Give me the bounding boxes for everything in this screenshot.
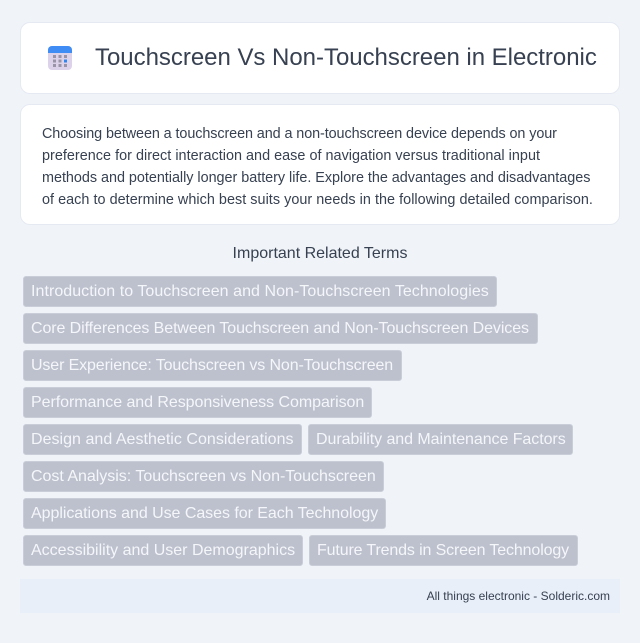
footer bar <box>20 579 620 613</box>
tag: future trends <box>309 535 578 566</box>
tag: core differences: Core Differences Between Touchscreen and Non-Touchscreen Devices <box>31 320 529 337</box>
tag: design <box>23 424 302 455</box>
tag: accessibility: Accessibility and User Demographics <box>31 542 295 559</box>
tag: performance <box>23 387 372 418</box>
tag: durability: Durability and Maintenance Factors <box>316 431 566 448</box>
tag: user experience: User Experience: Touchscreen vs Non-Touchscreen <box>31 357 393 374</box>
tag: user experience <box>23 350 402 381</box>
icon: calendar <box>48 46 72 70</box>
intro text: preference for direct interaction and ease of navigation versus traditional input <box>42 148 540 164</box>
tag: accessibility <box>23 535 303 566</box>
tag: introduction: Introduction to Touchscreen and Non-Touchscreen Technologies <box>31 283 489 300</box>
intro panel <box>20 104 620 225</box>
intro text: of each to determine which best suits your needs in the following detailed comparison. <box>42 192 593 208</box>
tag: core differences <box>23 313 538 344</box>
tag: applications <box>23 498 386 529</box>
intro text: Choosing between a touchscreen and a non-touchscreen device depends on your <box>42 126 557 142</box>
tag: performance: Performance and Responsiveness Comparison <box>31 394 364 411</box>
tag: future trends: Future Trends in Screen Technology <box>317 542 569 559</box>
tag: design: Design and Aesthetic Considerations <box>31 431 294 448</box>
header panel <box>20 22 620 94</box>
section heading: Important Related Terms <box>233 245 407 262</box>
title: Touchscreen Vs Non-Touchscreen in Electronic <box>95 44 597 71</box>
tag: durability <box>308 424 573 455</box>
footer text: All things electronic - Solderic.com <box>427 589 610 603</box>
intro text: methods and potentially longer battery life. Explore the advantages and disadvantages <box>42 170 590 186</box>
tag: cost <box>23 461 384 492</box>
tag: cost: Cost Analysis: Touchscreen vs Non-Touchscreen <box>31 468 376 485</box>
tag: applications: Applications and Use Cases for Each Technology <box>31 505 378 522</box>
intro text <box>42 126 593 208</box>
tag: introduction <box>23 276 497 307</box>
